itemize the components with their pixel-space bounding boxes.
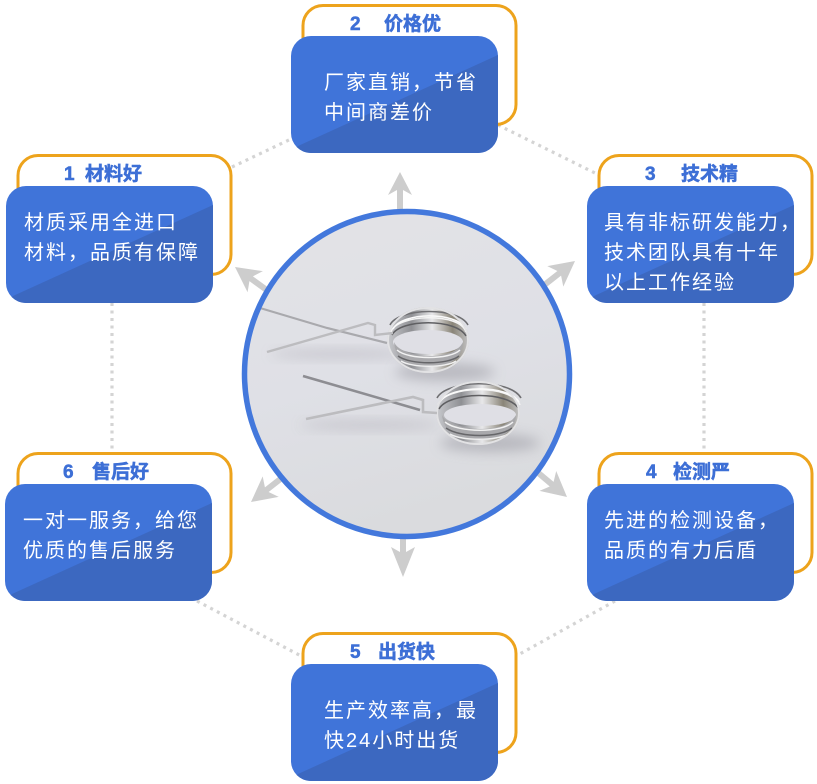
card body: 一对一服务: 优质的售后服务 (23, 539, 177, 562)
card body: 具有非标研发能力: 技术团队具有十年 (604, 241, 780, 264)
heading: 5 出货快: 5 (350, 642, 361, 663)
card body: 一对一服务 (5, 484, 212, 601)
heading: 1 材料好: 材料好 (85, 163, 142, 185)
card body: 生产效率高 (291, 664, 498, 781)
spring 1 (260, 307, 469, 373)
card body: 生产效率高: 快24小时出货 (324, 729, 460, 752)
panel: card 4 检测严 (587, 454, 812, 601)
heading: 1 材料好: 1 (64, 164, 75, 185)
card body: 材质采用全进口: 材料，品质有保障 (24, 241, 200, 264)
card body: 材质采用全进口: 材质采用全进口 (24, 211, 178, 234)
panel: card 5 出货快 (291, 634, 516, 781)
spring 2 (303, 376, 521, 445)
arrow: down to card 5 (391, 536, 415, 577)
card body: 具有非标研发能力: 以上工作经验 (604, 271, 736, 294)
card body: 一对一服务: 一对一服务，给您 (23, 509, 199, 532)
heading: 6 售后好: 6 (63, 462, 74, 483)
card body: 厂家直销: 厂家直销，节省 (324, 71, 478, 94)
panel: card 6 售后好 (5, 454, 231, 601)
card body: 生产效率高: 生产效率高，最 (324, 699, 478, 722)
heading: 2 价格优: 价格优 (384, 13, 441, 35)
arrow: up to card 2 (388, 172, 412, 209)
heading: 5 出货快: 出货快 (378, 640, 435, 663)
card body: 厂家直销: 中间商差价 (324, 101, 434, 124)
panel: card 1 材料好 (6, 156, 231, 303)
arrow: down-left to card 6 (243, 466, 292, 512)
card body: 厂家直销 (291, 36, 498, 153)
card body: 具有非标研发能力 (587, 186, 802, 303)
heading: 4 检测严: 4 (646, 462, 657, 483)
central photo of torsion springs (243, 210, 571, 538)
heading: 4 检测严: 检测严 (673, 460, 730, 483)
card body: 先进的检测设备 (587, 484, 794, 601)
panel: card 2 价格优 (291, 6, 516, 153)
heading: 3 技术精: 技术精 (681, 163, 738, 185)
arrow: up-left to card 1 (227, 256, 277, 302)
card body: 具有非标研发能力: 具有非标研发能力， (604, 211, 802, 234)
heading: 3 技术精: 3 (645, 164, 656, 185)
arrow: up-right to card 3 (534, 251, 583, 297)
panel: card 3 技术精 (587, 156, 812, 303)
heading: 6 售后好: 售后好 (92, 461, 149, 483)
dotted connector lines (112, 125, 704, 657)
card body: 先进的检测设备: 先进的检测设备， (604, 509, 780, 532)
arrow: down-right to card 4 (526, 460, 575, 507)
card body: 材质采用全进口 (6, 186, 213, 303)
card body: 先进的检测设备: 品质的有力后盾 (604, 539, 758, 562)
heading: 2 价格优: 2 (350, 14, 361, 35)
